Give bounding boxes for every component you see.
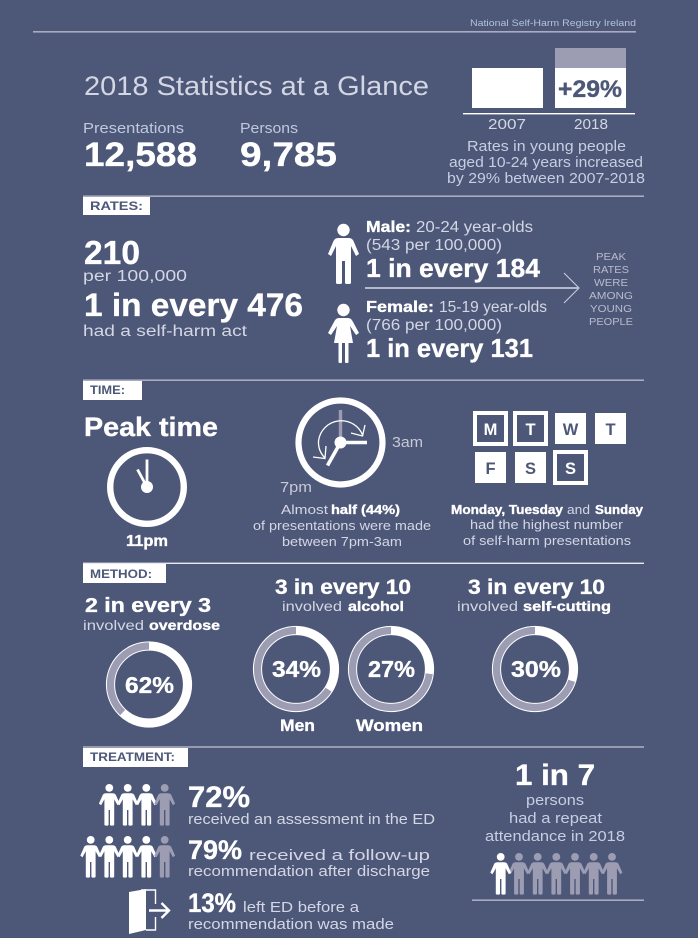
text: male rate: (543 per 100,000) — [366, 237, 502, 254]
donut: women 27%: 27% — [368, 656, 415, 682]
text: almost half: between 7pm-3am — [282, 534, 402, 549]
bar chart: young people rates 2007 vs 2018: +29% — [558, 76, 622, 103]
stat: persons: Persons — [240, 120, 298, 137]
text: 79% follow-up: 79% — [188, 835, 242, 865]
text: rates in young people — [447, 139, 645, 187]
text: rates in young people: by 29% between 2007-2018 — [447, 171, 645, 187]
icon: male figure — [328, 224, 359, 284]
text: peak rates: RATES — [593, 264, 629, 276]
icon: clock 7pm to 3am — [298, 400, 382, 484]
text: male rate: Male: — [366, 219, 411, 236]
heading: treatment: TREATMENT: — [90, 750, 175, 764]
icon: days of week — [475, 413, 626, 483]
text: female rate — [366, 299, 547, 363]
text: women: Women — [356, 716, 423, 735]
text: highest days: Sunday — [595, 502, 644, 517]
donut: self-cutting 30% — [492, 626, 578, 712]
icon: people 79% — [80, 836, 175, 878]
bar chart: young people rates 2007 vs 2018 — [463, 48, 635, 133]
text: 79% follow-up: received a follow-up — [249, 847, 430, 864]
icon: days of week: F — [485, 460, 496, 478]
text: female rate: 1 in every 131 — [366, 333, 533, 363]
stat: persons: 9,785 — [240, 136, 337, 174]
stat: presentations: 12,588 — [84, 136, 197, 174]
donut: overdose 62% — [106, 642, 192, 727]
heading: method: METHOD: — [90, 567, 152, 581]
icon: days of week: T — [605, 421, 616, 439]
text: self-cutting — [457, 576, 611, 614]
text: 1 in 7 repeat: 1 in 7 — [515, 759, 595, 792]
donut: men 34%: 34% — [272, 656, 321, 682]
icon: female figure — [328, 304, 359, 363]
bar chart: young people rates 2007 vs 2018: 2007 — [488, 117, 526, 133]
heading: time — [83, 381, 142, 400]
text: 13% left ED: left ED before a — [243, 899, 360, 916]
donut: self-cutting 30%: 30% — [511, 656, 561, 682]
text: clock labels: 3am — [392, 434, 423, 451]
text: 1 in 7 repeat: persons — [526, 792, 584, 809]
title: 2018 Statistics at a Glance — [84, 71, 429, 101]
text: 72% assessment: received an assessment in the ED — [188, 811, 435, 828]
text: male rate — [366, 219, 541, 283]
text: peak rates: WERE — [594, 277, 628, 289]
icon: clock at 11pm — [110, 450, 184, 524]
text: almost half: of presentations were made — [253, 518, 431, 533]
heading: rates: RATES: — [90, 199, 143, 213]
text: highest days: had the highest number — [470, 517, 624, 532]
text: 72% assessment — [188, 781, 435, 828]
text: peak time: Peak time — [84, 412, 218, 442]
text: overdose — [83, 595, 221, 633]
text: 13% left ED: recommendation was made — [188, 916, 394, 933]
icon: days of week: S — [525, 460, 536, 478]
icon: people 72% — [99, 784, 175, 826]
text: 72% assessment: 72% — [188, 781, 250, 814]
overall rate stats: had a self-harm act — [83, 323, 248, 340]
text: 1 in 7 repeat — [485, 759, 625, 845]
text: peak rates: AMONG — [589, 290, 633, 302]
text: 13% left ED — [188, 888, 394, 933]
icon: days of week: M — [484, 421, 497, 439]
text: female rate: Female: — [366, 299, 434, 316]
stat: presentations: Presentations — [83, 120, 184, 137]
text: highest days: of self-harm presentations — [463, 533, 632, 548]
text: 1 in 7 repeat: attendance in 2018 — [485, 828, 625, 845]
text: clock labels: 7pm — [280, 479, 312, 496]
overall rate stats: per 100,000 — [83, 268, 187, 285]
text: 1 in 7 repeat: had a repeat — [509, 810, 603, 827]
heading: time: TIME: — [90, 383, 125, 397]
header source label: National Self-Harm Registry Ireland — [470, 18, 636, 29]
heading: rates — [83, 197, 150, 215]
text: male rate: 20-24 year-olds — [416, 219, 533, 236]
icon: door exit — [129, 889, 169, 934]
text: alcohol — [275, 576, 411, 614]
icon: seven people — [490, 853, 622, 895]
stat: presentations — [83, 120, 197, 174]
donut: overdose 62%: 62% — [125, 672, 174, 698]
text: peak rates: PEOPLE — [589, 316, 633, 328]
text: alcohol: alcohol — [348, 599, 404, 614]
text: 13% left ED: 13% — [188, 888, 236, 918]
text: highest days — [451, 502, 644, 548]
heading: method — [83, 564, 166, 583]
text: highest days: Monday, Tuesday — [451, 502, 564, 517]
text: almost half — [253, 502, 431, 549]
text: 79% follow-up: recommendation after discharge — [188, 863, 430, 880]
heading: treatment — [83, 748, 188, 767]
icon: days of week: S — [565, 460, 576, 478]
text: female rate: 15-19 year-olds — [439, 299, 547, 316]
text: rates in young people: Rates in young people — [467, 139, 626, 155]
text: clock labels — [280, 434, 423, 496]
text: self-cutting: 3 in every 10 — [468, 576, 605, 599]
bar chart: young people rates 2007 vs 2018: 2018 — [574, 117, 608, 133]
text: 11pm: 11pm — [126, 533, 168, 550]
text: male rate: 1 in every 184 — [366, 253, 541, 283]
overall rate stats — [83, 234, 303, 340]
text: almost half: half (44%) — [331, 502, 400, 517]
text: men: Men — [280, 716, 315, 735]
text: peak rates: PEAK — [596, 251, 626, 263]
text: female rate: (766 per 100,000) — [366, 317, 502, 334]
icon: days of week: T — [525, 421, 536, 439]
stat: persons — [240, 120, 337, 174]
donut: women 27% — [348, 626, 434, 712]
text: peak rates: YOUNG — [590, 303, 632, 315]
text: overdose: overdose — [149, 618, 221, 633]
text: almost half: Almost — [281, 502, 328, 517]
text: overdose: 2 in every 3 — [85, 595, 211, 617]
arrow — [365, 273, 579, 303]
text: highest days: and — [567, 502, 590, 517]
text: self-cutting: involved — [457, 599, 518, 614]
text: rates in young people: aged 10-24 years increased — [449, 155, 643, 171]
text: peak rates — [589, 251, 633, 328]
text: alcohol: 3 in every 10 — [275, 576, 411, 599]
overall rate stats: 210 — [84, 234, 140, 271]
text: self-cutting: self-cutting — [523, 599, 611, 614]
donut: men 34% — [253, 626, 339, 712]
text: overdose: involved — [83, 618, 144, 633]
icon: days of week: W — [563, 421, 579, 439]
overall rate stats: 1 in every 476 — [84, 287, 303, 323]
text: 79% follow-up — [188, 835, 430, 880]
text: alcohol: involved — [282, 599, 342, 614]
